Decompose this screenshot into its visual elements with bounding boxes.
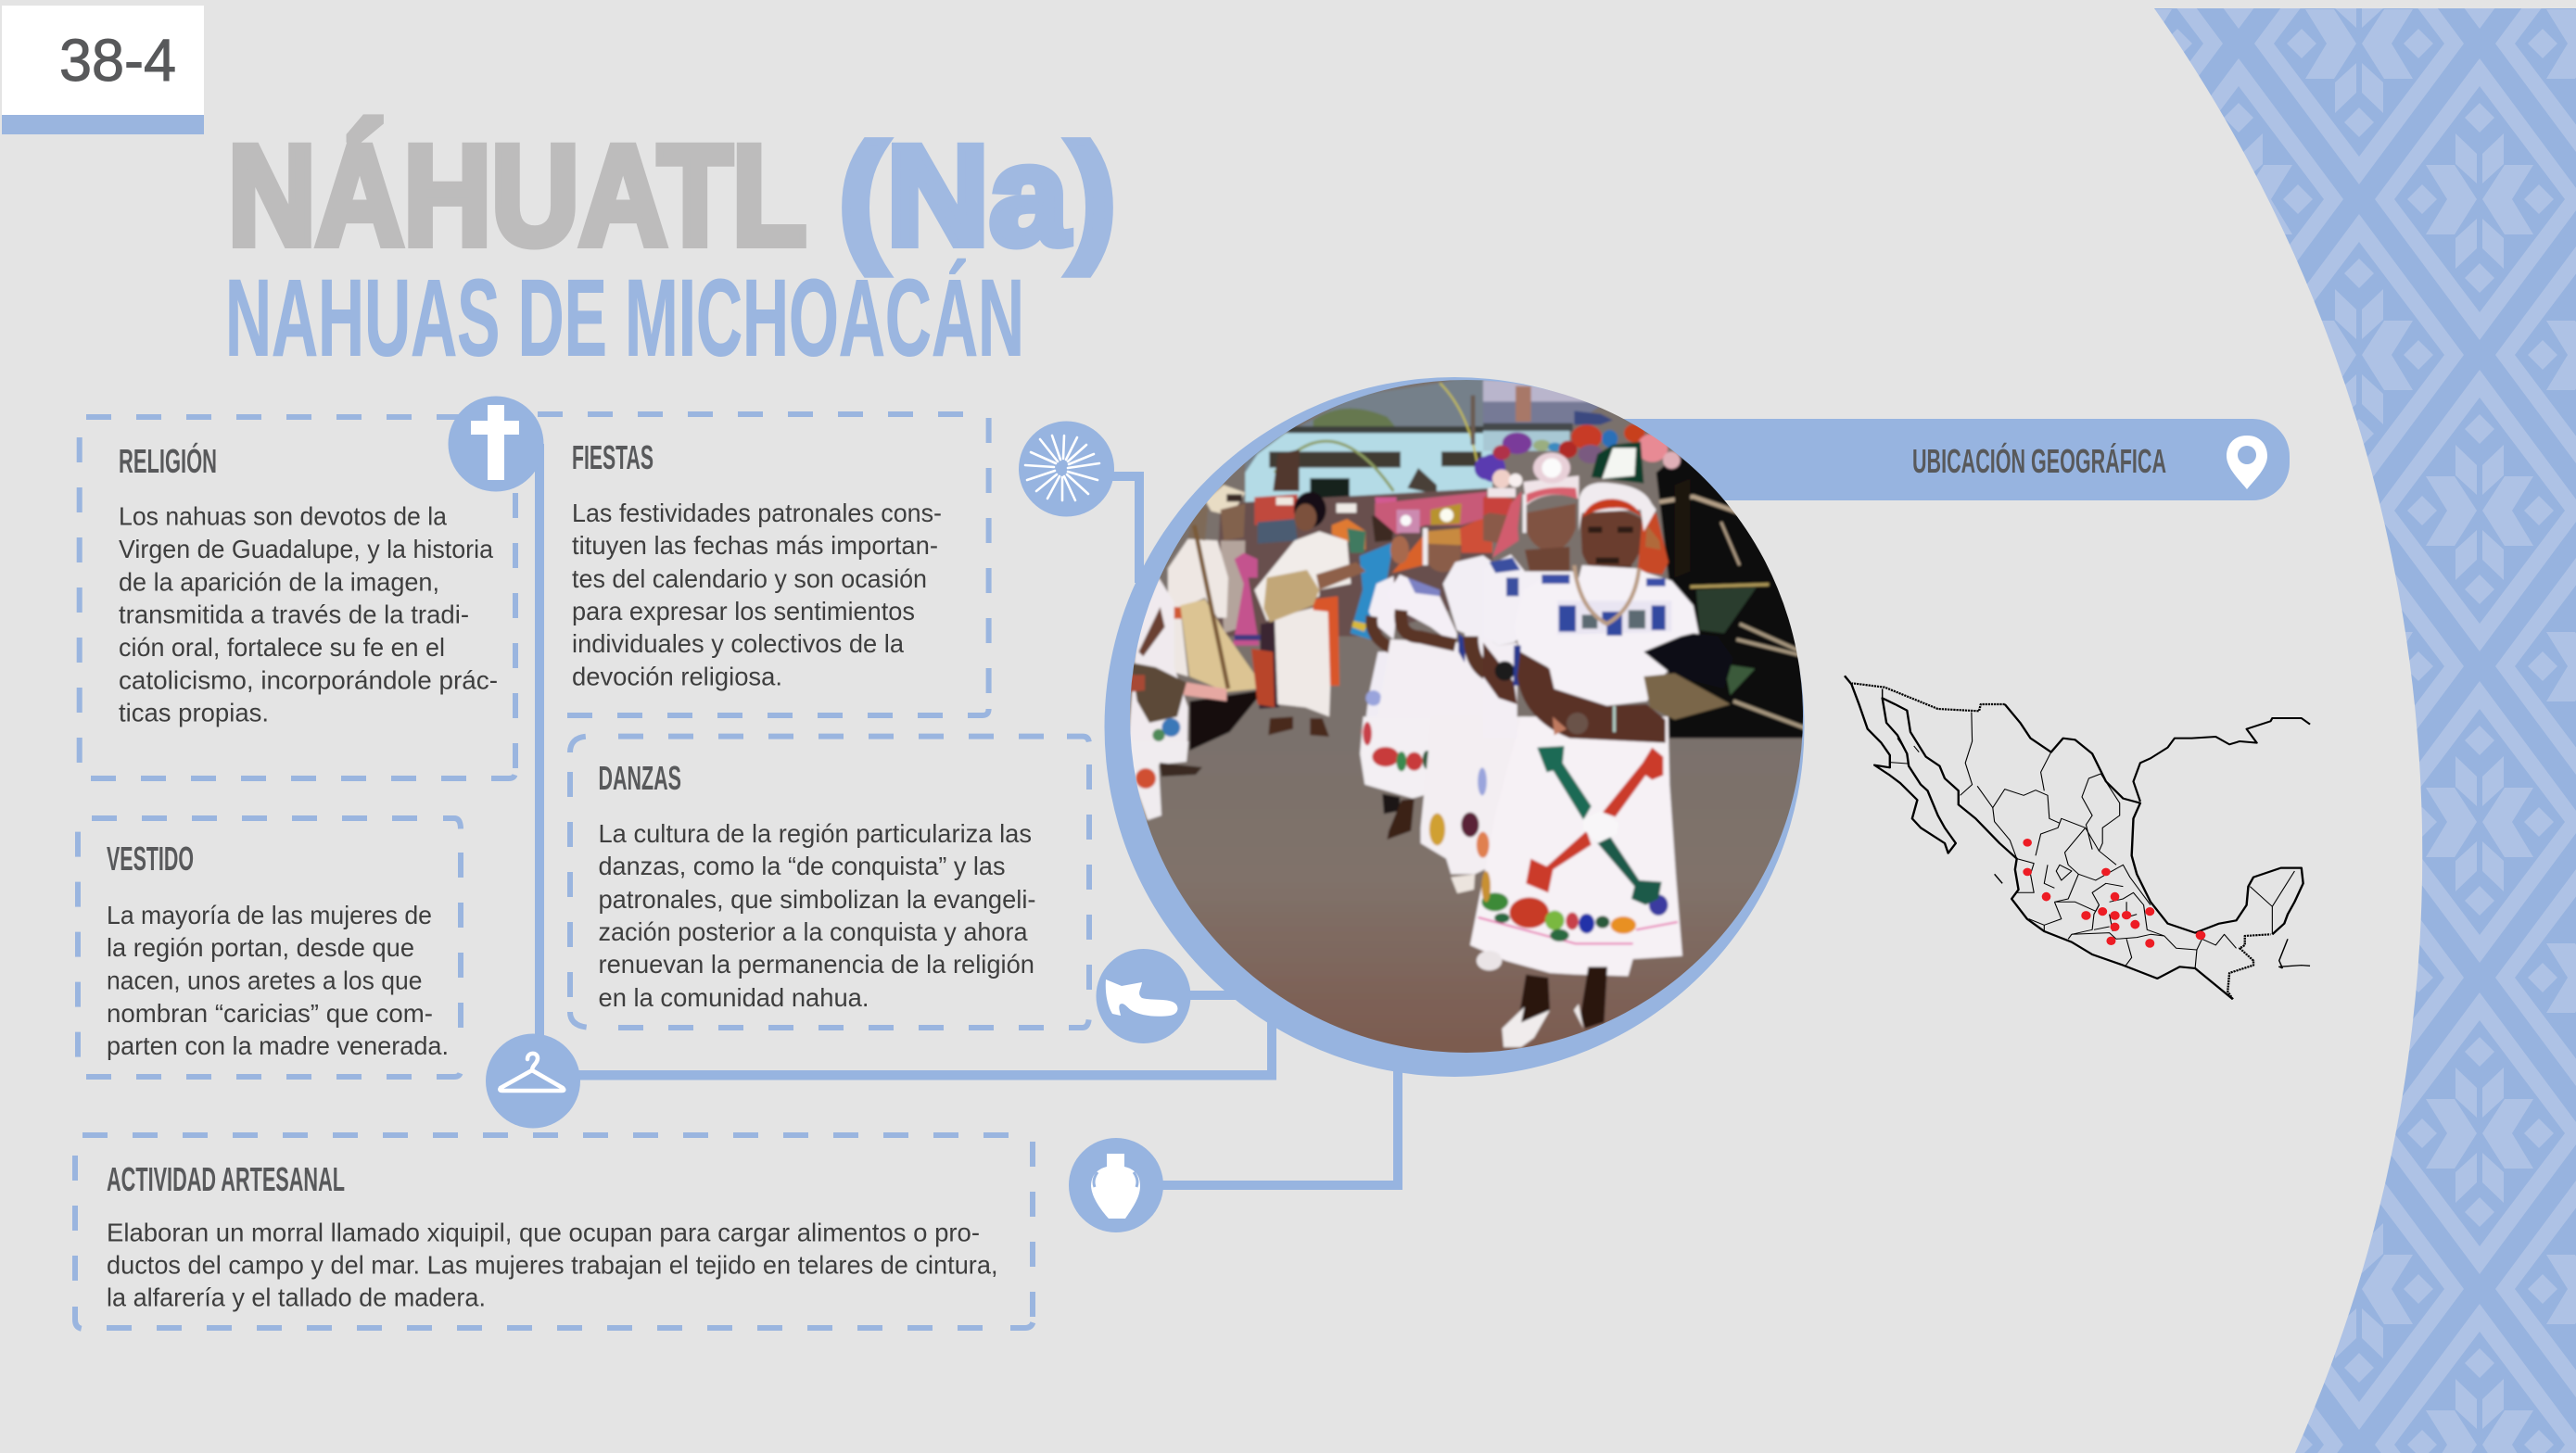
icon: shoe — [1096, 949, 1190, 1043]
ribbons — [1526, 746, 1663, 905]
body: fiestas: Las festividades patronales cons- — [572, 499, 942, 527]
body: vestido: nacen, unos aretes a los que — [107, 966, 423, 995]
body: danzas: patronales, que simbolizan la evangeli- — [599, 885, 1036, 914]
body: danzas — [599, 819, 1036, 1012]
body: vestido: la región portan, desde que — [107, 933, 414, 962]
body: fiestas: para expresar los sentimientos — [572, 597, 915, 625]
body: danzas: renuevan la permanencia de la religión — [599, 950, 1034, 979]
heading: religión: RELIGIÓN — [119, 441, 217, 480]
heading: fiestas: FIESTAS — [572, 438, 654, 476]
left figure lower — [1128, 741, 1188, 820]
body: religión: ticas propias. — [119, 699, 269, 726]
body: vestido — [107, 901, 449, 1060]
body: actividad artesanal — [107, 1218, 997, 1312]
body: vestido: La mayoría de las mujeres de — [107, 901, 432, 929]
body: religión: transmitida a través de la tradi- — [119, 600, 469, 628]
heading: vestido: VESTIDO — [107, 840, 194, 878]
body: religión: catolicismo, incorporándole prác- — [119, 665, 498, 695]
title: (Na) — [839, 117, 1116, 274]
body: fiestas: tes del calendario y son ocasión — [572, 564, 927, 593]
body: vestido: nombran “caricias” que com- — [107, 999, 433, 1028]
map of Mexico — [1845, 676, 2310, 999]
body: danzas: danzas, como la “de conquista” y las — [599, 852, 1005, 880]
photo ring — [1105, 377, 1804, 1077]
main figures and palm — [1479, 380, 1823, 743]
body: fiestas: devoción religiosa. — [572, 662, 782, 691]
panel: vestido — [78, 818, 461, 1077]
connector lines — [535, 444, 1402, 1190]
body: religión: Virgen de Guadalupe, y la historia — [119, 535, 493, 563]
heading: actividad artesanal: ACTIVIDAD ARTESANAL — [107, 1160, 345, 1198]
panel: actividad artesanal — [75, 1135, 1034, 1329]
panel: religión — [80, 417, 515, 778]
icon: jar — [1069, 1138, 1163, 1232]
body: religión: Los nahuas son devotos de la — [119, 502, 447, 530]
body: religión — [119, 502, 498, 726]
body: religión: de la aparición de la imagen, — [119, 567, 439, 597]
panel: fiestas — [538, 414, 989, 715]
location bar — [1576, 419, 2290, 500]
icon: fireworks — [1019, 421, 1114, 517]
body: danzas: en la comunidad nahua. — [599, 983, 869, 1012]
icon: hanger — [486, 1034, 580, 1129]
body: actividad artesanal: ductos del campo y del mar. Las mujeres trabajan el tejido en telares de cintura, — [107, 1251, 997, 1279]
front skirts — [1360, 716, 1682, 1047]
location bar: UBICACIÓN GEOGRÁFICA — [1912, 441, 2166, 480]
body: religión: ción oral, fortalece su fe en el — [119, 633, 445, 662]
title: NÁHUATL — [228, 117, 806, 274]
body: fiestas — [572, 499, 942, 691]
panel: danzas — [570, 737, 1089, 1028]
textile pattern band — [2154, 8, 2576, 1453]
page number tag: 38-4 — [59, 27, 176, 94]
icon: cross — [449, 397, 543, 491]
body: actividad artesanal: la alfarería y el tallado de madera. — [107, 1282, 486, 1312]
body: vestido: parten con la madre venerada. — [107, 1031, 449, 1060]
body: danzas: La cultura de la región particulariza las — [599, 819, 1032, 848]
body: actividad artesanal: Elaboran un morral llamado xiquipil, que ocupan para cargar alimentos o pro- — [107, 1218, 980, 1247]
body: danzas: zación posterior a la conquista y ahora — [599, 917, 1028, 946]
body: fiestas: individuales y colectivos de la — [572, 629, 904, 658]
subtitle: NAHUAS DE MICHOACÁN — [225, 258, 1024, 380]
location markers — [2023, 839, 2205, 948]
photo: women in traditional dress — [1112, 371, 1826, 1066]
heading: danzas: DANZAS — [599, 759, 681, 797]
icon: location pin — [2227, 436, 2267, 489]
page number tag — [2, 6, 204, 134]
background and left figures — [1128, 371, 1498, 753]
body: fiestas: tituyen las fechas más importan- — [572, 531, 938, 560]
